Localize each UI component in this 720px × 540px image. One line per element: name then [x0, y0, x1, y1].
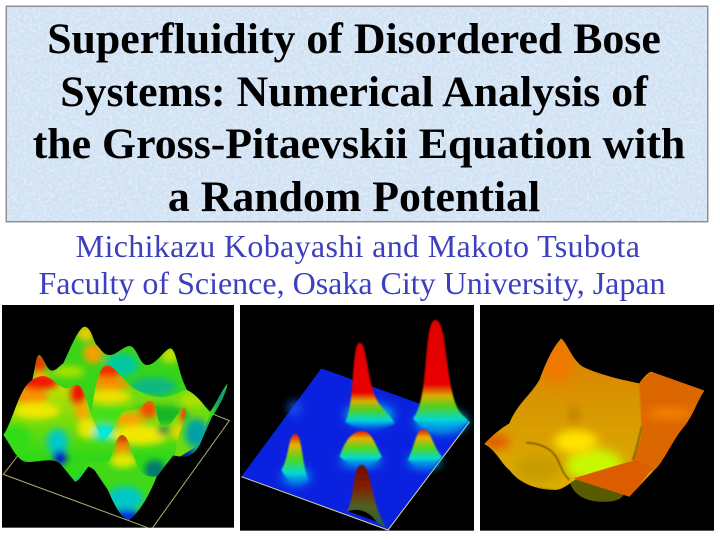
title text: Superfluidity of Disordered Bose: [47, 15, 661, 63]
peak left: [281, 434, 310, 484]
peak right: [408, 429, 442, 468]
blue plane: [241, 368, 470, 530]
panel: localized condensate peaks: [240, 305, 474, 531]
title text: the Gross-Pitaevskii Equation with: [33, 120, 685, 168]
back ridge: [32, 326, 228, 456]
title text: Systems: Numerical Analysis of: [60, 68, 648, 116]
panel: disordered condensate surface: [0, 305, 234, 528]
front peak: [68, 435, 156, 520]
plane bright patch: [289, 401, 301, 416]
dark bowl underside: [569, 477, 624, 502]
authors and affiliation: Michikazu Kobayashi and Makoto Tsubota: [76, 228, 640, 264]
title text: [33, 15, 685, 221]
black cut at front peak: [348, 510, 376, 522]
main sheet: [484, 338, 704, 497]
grid base outline: [3, 414, 229, 528]
authors and affiliation: Faculty of Science, Osaka City University, Japan: [38, 265, 666, 301]
front surface: [3, 376, 186, 492]
plane edge: [241, 422, 470, 530]
middle ridge: [92, 365, 210, 457]
panel: orange surface: [480, 305, 714, 531]
simulation images: [2, 305, 714, 531]
sheet colour shading: [483, 343, 709, 498]
peak back right: [413, 320, 469, 433]
peak back centre: [345, 343, 395, 429]
title panel: [6, 6, 708, 222]
right flap: [633, 372, 709, 473]
front dark peak: [346, 465, 386, 528]
authors and affiliation: [38, 228, 666, 301]
front flap: [573, 460, 653, 498]
dome centre: [340, 431, 382, 467]
crease lines: [526, 427, 642, 480]
title text: a Random Potential: [168, 173, 540, 221]
